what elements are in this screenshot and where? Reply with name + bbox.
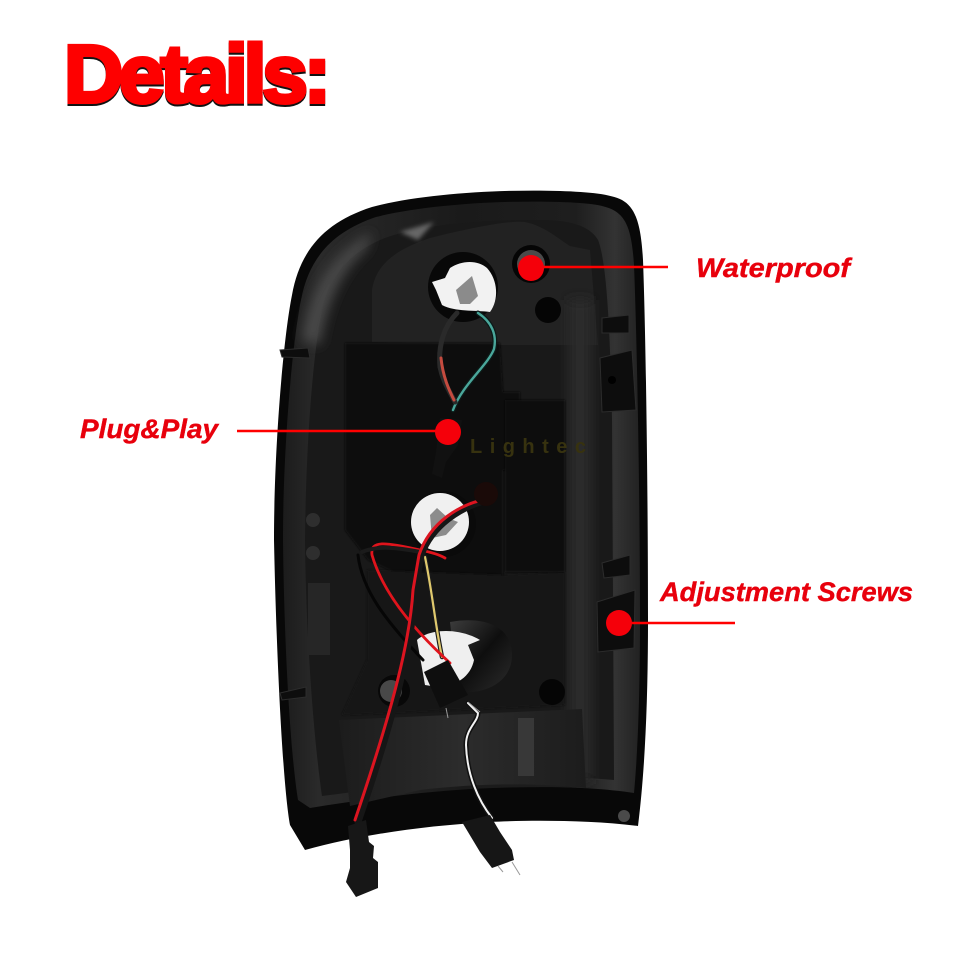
top socket — [428, 252, 498, 322]
housing rim — [283, 202, 640, 808]
lower right connector — [462, 815, 520, 875]
molded markings — [306, 513, 534, 776]
left rim highlight — [302, 232, 372, 345]
callout: Adjustment Screws — [606, 577, 913, 636]
inner body — [305, 220, 614, 796]
clip hole — [608, 376, 616, 384]
bottom socket — [417, 620, 512, 692]
title: Details: — [64, 31, 331, 122]
callout: Waterproof: Waterproof — [696, 253, 853, 283]
callout: Plug&Play: Plug&Play — [80, 414, 220, 444]
bottom corner screw — [618, 810, 630, 822]
watermark: Lightec — [470, 436, 586, 458]
socket shoulder panel — [372, 222, 598, 345]
middle connector — [424, 660, 480, 718]
housing outer shell — [274, 191, 648, 850]
wire grommet — [474, 482, 498, 506]
lower left connector — [346, 820, 378, 897]
central recess — [345, 343, 520, 585]
title: Details: — [64, 29, 331, 120]
lower right hole — [539, 679, 565, 705]
callout: Waterproof — [518, 253, 853, 283]
vent hole — [535, 297, 561, 323]
right dark band — [505, 400, 565, 572]
side clips — [280, 315, 636, 700]
lower grommet — [378, 675, 410, 707]
callout: Plug&Play — [80, 414, 461, 445]
middle socket — [410, 491, 476, 557]
lower wires — [355, 499, 492, 822]
lower bulb recess — [342, 570, 565, 715]
top left glare — [400, 222, 434, 240]
upper connector — [432, 418, 462, 478]
waterproof plug — [512, 245, 550, 283]
callout: Adjustment Screws: Adjustment Screws — [659, 577, 913, 607]
bottom raised block — [339, 709, 586, 806]
upper wires — [440, 313, 495, 410]
right column highlight — [568, 300, 592, 780]
tail light housing — [274, 191, 648, 897]
